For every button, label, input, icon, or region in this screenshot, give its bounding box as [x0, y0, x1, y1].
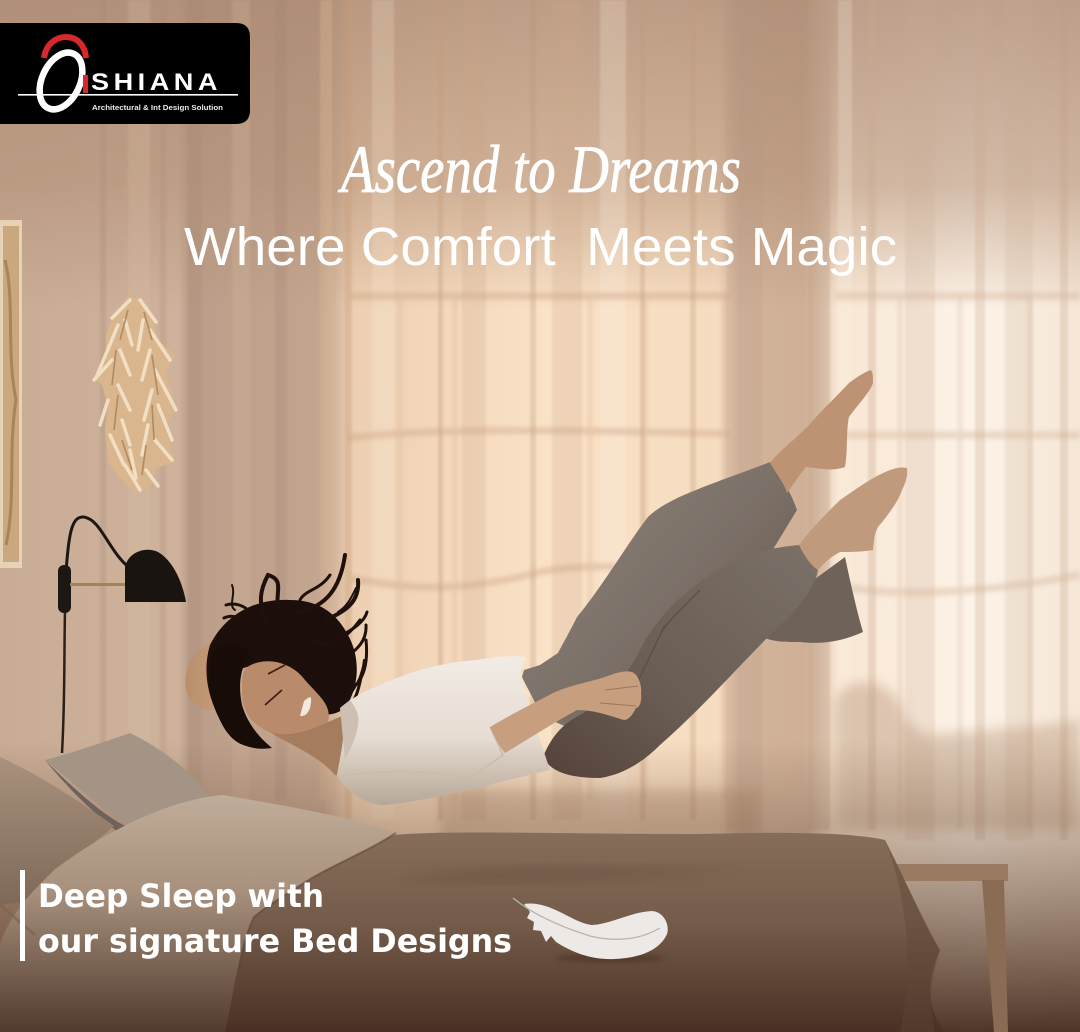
- sleeve edge: [345, 727, 503, 778]
- headline: [184, 131, 897, 277]
- shirt: [337, 656, 550, 805]
- window mullions: [348, 296, 1080, 830]
- pillow edge: [45, 760, 135, 832]
- left pillow: [0, 757, 114, 905]
- wall lamp: [58, 517, 186, 753]
- floating woman: [185, 370, 907, 805]
- raised arm: [185, 613, 256, 710]
- sub heading: Where Comfort Meets Magic: [184, 217, 897, 277]
- back trouser leg: [522, 462, 797, 760]
- duvet: [225, 832, 945, 1032]
- closed eyes: [265, 665, 285, 705]
- script heading: Ascend to Dreams: [338, 131, 741, 207]
- caption text: our signature Bed Designs: [38, 922, 512, 960]
- front trouser leg: [543, 545, 818, 778]
- logo panel: [0, 23, 250, 124]
- collar shadow: [340, 700, 358, 760]
- wall feather decoration: [93, 296, 176, 492]
- bed: [0, 733, 945, 1032]
- smile: [300, 697, 311, 716]
- neck: [270, 716, 345, 776]
- caption: [20, 870, 512, 961]
- caption rule: [20, 870, 25, 961]
- flared cuff: [762, 557, 863, 643]
- back pillow: [45, 733, 210, 830]
- forearm and hand: [490, 671, 641, 753]
- hair lower: [209, 644, 272, 749]
- bedside table: [885, 864, 1008, 1032]
- feather: [513, 898, 668, 963]
- caption text: [38, 877, 512, 960]
- logo tagline: Architectural & Int Design Solution: [92, 103, 223, 112]
- face: [242, 661, 329, 737]
- bottom shading: [0, 740, 1080, 1032]
- upper foot: [770, 370, 873, 493]
- caption text: Deep Sleep with: [38, 877, 324, 915]
- lower silhouettes behind curtain: [440, 683, 1080, 840]
- wall painting: [0, 220, 22, 568]
- logo mark: [31, 37, 91, 116]
- logo wordmark: SHIANA: [91, 69, 222, 96]
- hair back: [206, 555, 367, 746]
- front pillow: [0, 795, 396, 1032]
- lower foot: [799, 467, 907, 570]
